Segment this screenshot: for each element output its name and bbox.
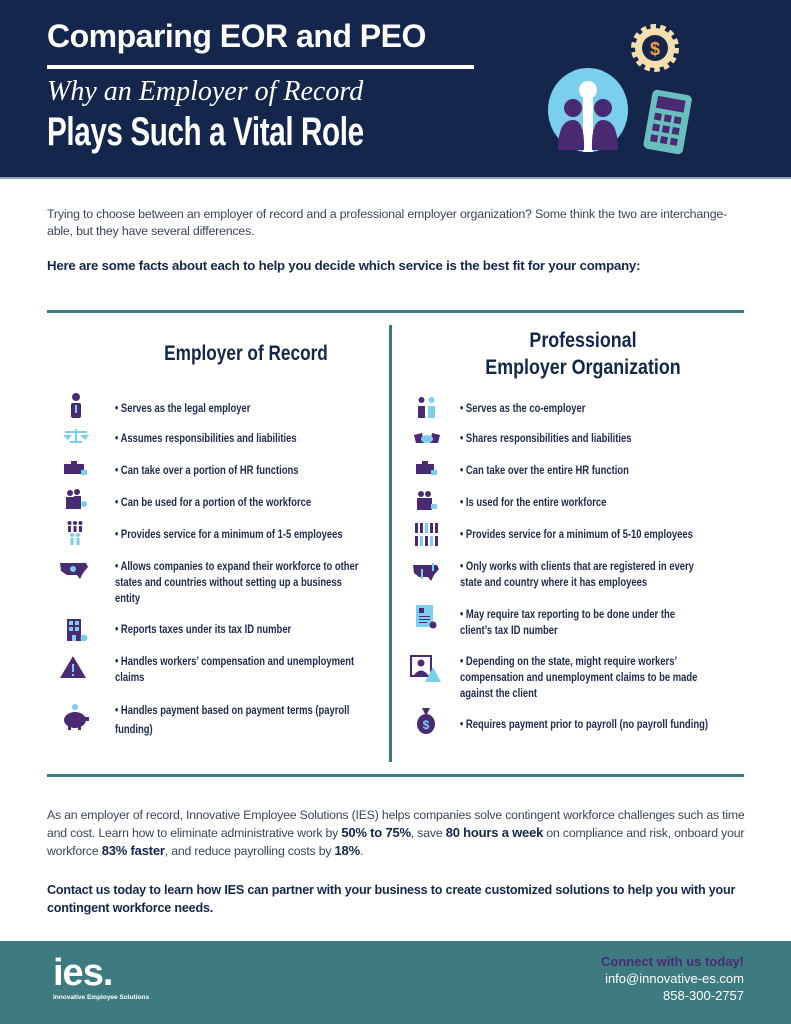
logo	[53, 952, 149, 1001]
heading EOR: Employer of Record	[164, 342, 328, 365]
panel: employer of record: • Allows companies to expand their workforce to other states and countries without setting up a business entity	[115, 561, 358, 605]
intro text	[47, 207, 727, 238]
icon: briefcase	[64, 461, 87, 475]
contact info: info@innovative-es.com	[605, 971, 744, 986]
logo: Innovative Employee Solutions	[53, 994, 149, 1001]
panel: professional employer organization: • Only works with clients that are registered in every state and country where it has employees	[460, 561, 694, 589]
panel: employer of record: • Can be used for a portion of the workforce	[115, 497, 311, 509]
icon: piggy bank	[64, 704, 89, 730]
icon: us map pins	[413, 563, 439, 581]
subtitle script: Why an Employer of Record	[47, 76, 363, 107]
icon: family	[66, 489, 87, 509]
icon: scale	[63, 429, 89, 443]
logo: ies.	[53, 952, 112, 994]
panel: employer of record: • Handles workers’ compensation and unemployment claims	[115, 656, 354, 684]
panel: professional employer organization: • Provides service for a minimum of 5-10 employees	[460, 529, 693, 541]
icon: people circle, gear, calculator	[548, 24, 692, 154]
heading PEO: Professional	[529, 329, 637, 352]
icon: money bag	[417, 708, 435, 734]
icon: people circle, gear, calculator: $	[650, 39, 660, 59]
panel: professional employer organization: • Shares responsibilities and liabilities	[460, 433, 632, 445]
intro bold line: Here are some facts about each to help you decide which service is the best fit for your company:	[47, 258, 640, 273]
icon: person	[71, 393, 81, 418]
closing paragraph: As an employer of record, Innovative Employee Solutions (IES) helps companies solve contingent workforce challenges such as time and cost. Learn how to eliminate administrative work by 50% to 75%, save 80 hours a week on compliance and risk, onboard your workforce 83% faster, and reduce payrolling costs by 18%.	[47, 808, 745, 858]
icon: person warning	[410, 655, 441, 682]
intro text: able, but they have several differences.	[47, 224, 254, 238]
header banner	[0, 0, 791, 177]
contact info: 858-300-2757	[663, 988, 744, 1003]
icon: us map	[60, 563, 88, 579]
footer	[0, 941, 791, 1024]
heading PEO	[485, 329, 681, 379]
icon: document	[416, 605, 436, 628]
intro text: Trying to choose between an employer of record and a professional employer organization? Some think the two are interchange-	[47, 207, 727, 221]
icon: employees	[68, 521, 82, 545]
subtitle bold: Plays Such a Vital Role	[47, 110, 364, 154]
panel: employer of record: • Reports taxes under its tax ID number	[115, 624, 291, 636]
heading PEO: Employer Organization	[485, 356, 681, 379]
icon: many employees	[415, 523, 438, 546]
panel: employer of record: • Provides service for a minimum of 1-5 employees	[115, 529, 343, 541]
icon: co-employers	[418, 397, 435, 418]
panel: professional employer organization: • Can take over the entire HR function	[460, 465, 629, 477]
icon: family	[417, 491, 437, 510]
panel: employer of record: • Handles payment based on payment terms (payroll funding)	[115, 705, 349, 736]
icon: briefcase	[416, 461, 437, 475]
panel: professional employer organization: • Depending on the state, might require workers’ compensation and unemployment claims to be made against the client	[460, 656, 697, 700]
panel: professional employer organization: • Is used for the entire workforce	[460, 497, 606, 509]
panel: employer of record: • Assumes responsibilities and liabilities	[115, 433, 297, 445]
contact info: Connect with us today!	[601, 954, 744, 969]
call to action: Contact us today to learn how IES can partner with your business to create customized solutions to help you with your contingent workforce needs.	[47, 883, 735, 915]
panel: employer of record: • Can take over a portion of HR functions	[115, 465, 299, 477]
panel: employer of record	[60, 342, 358, 736]
panel: professional employer organization: • May require tax reporting to be done under the client’s tax ID number	[460, 609, 675, 637]
title: Comparing EOR and PEO	[47, 18, 426, 54]
icon: handshake	[414, 433, 440, 443]
panel: professional employer organization: • Serves as the co-employer	[460, 403, 585, 415]
panel: professional employer organization	[410, 329, 708, 734]
contact info	[601, 954, 744, 1003]
icon: warning	[60, 656, 86, 678]
title underline	[47, 65, 474, 69]
item: • Serves as the legal employer	[115, 403, 250, 415]
icon: building	[67, 619, 88, 641]
panel: professional employer organization: • Requires payment prior to payroll (no payroll funding)	[460, 719, 708, 731]
icon: money bag: $	[423, 718, 430, 732]
